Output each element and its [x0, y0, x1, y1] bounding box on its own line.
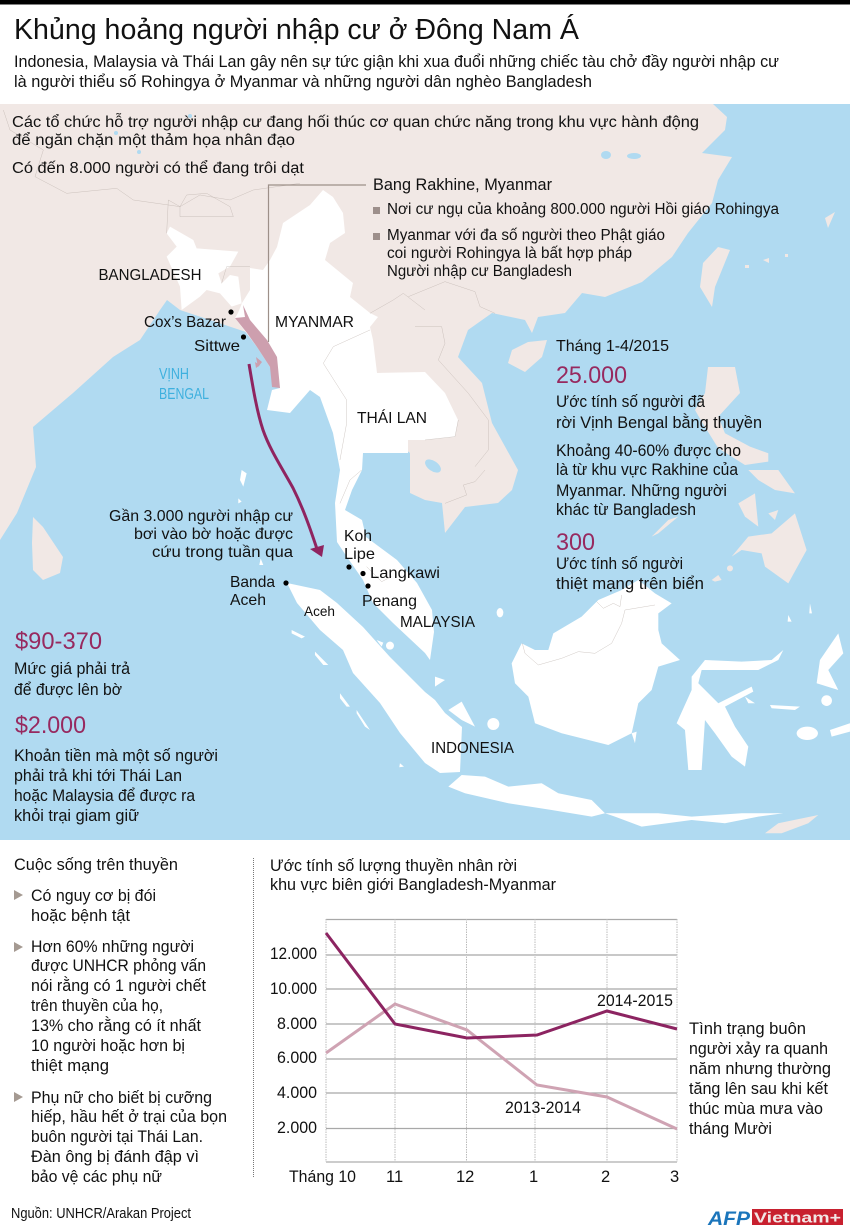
map labels: BANGLADESH: [98, 267, 202, 284]
side note: thúc mùa mưa vào: [689, 1100, 823, 1118]
callout: Rakhine state: Bang Rakhine, Myanmar: [373, 176, 552, 194]
y axis labels: 4.000: [277, 1084, 317, 1102]
stats: January to April 2015: [556, 338, 762, 593]
panel: life on boats: hoặc bệnh tật: [31, 907, 130, 925]
x axis labels: [289, 1168, 679, 1186]
x axis labels: 12: [456, 1168, 474, 1186]
Lesser Sunda: [605, 813, 783, 827]
x axis labels: 2: [601, 1168, 610, 1186]
panel: life on boats: hiếp, hầu hết ở trại của bọn: [31, 1108, 227, 1126]
x axis labels: 11: [386, 1168, 403, 1186]
Sulawesi: [677, 650, 783, 770]
map labels: Lipe: [344, 546, 375, 563]
title: Khủng hoảng người nhập cư ở Đông Nam Á: [14, 13, 580, 46]
callout: 3000 migrants: [109, 508, 293, 561]
stats: prices: [14, 628, 218, 825]
migration route arrow: [249, 364, 324, 557]
intro text: [12, 114, 699, 177]
side note: người xảy ra quanh: [689, 1040, 828, 1058]
panel: life on boats: trên thuyền của họ,: [31, 997, 163, 1015]
Java: [448, 775, 605, 817]
stats: prices: hoặc Malaysia để được ra: [14, 787, 196, 805]
stats: January to April 2015: là từ khu vực Rakhine của: [556, 461, 739, 479]
side note: [689, 1020, 831, 1138]
map labels: Langkawi: [370, 565, 440, 582]
x axis labels: 1: [529, 1168, 538, 1186]
stats: January to April 2015: Ước tính số người: [556, 555, 683, 573]
chart title: [270, 857, 556, 894]
callout: Rakhine state: [373, 176, 779, 280]
stats: prices: để được lên bờ: [14, 681, 122, 699]
panel: life on boats: Cuộc sống trên thuyền: [14, 856, 178, 874]
map labels: Cox’s Bazar: [144, 314, 227, 331]
panel: life on boats: được UNHCR phỏng vấn: [31, 957, 206, 975]
map land: islands in beige: [32, 212, 835, 833]
intro text: Các tổ chức hỗ trợ người nhập cư đang hối thúc cơ quan chức năng trong khu vực hành động: [12, 114, 699, 131]
side note: tăng lên sau khi kết: [689, 1080, 828, 1098]
stats: January to April 2015: khác từ Bangladesh: [556, 501, 696, 519]
intro text: để ngăn chặn một thảm họa nhân đạo: [12, 132, 295, 149]
stats: prices: Khoản tiền mà một số người: [14, 747, 218, 765]
stats: January to April 2015: Ước tính số người đã: [556, 393, 706, 411]
subtitle: Indonesia, Malaysia và Thái Lan gây nên sự tức giận khi xua đuổi những chiếc tàu chở đầy người nhập cư: [14, 53, 779, 71]
map labels: INDONESIA: [431, 740, 514, 757]
stats: January to April 2015: 300: [556, 529, 595, 556]
logo: [707, 1209, 843, 1230]
y axis labels: [270, 945, 317, 1137]
stats: January to April 2015: 25.000: [556, 362, 627, 389]
stats: prices: $2.000: [15, 712, 86, 739]
map labels: Sittwe: [194, 338, 240, 355]
stats: January to April 2015: rời Vịnh Bengal bằng thuyền: [556, 413, 762, 432]
panel: life on boats: Đàn ông bị đánh đập vì: [31, 1148, 199, 1166]
map labels: MALAYSIA: [400, 614, 475, 631]
map labels: Aceh: [230, 592, 266, 609]
stats: prices: phải trả khi tới Thái Lan: [14, 767, 182, 785]
map land: national borders: [3, 110, 655, 665]
series labels: [505, 992, 673, 1117]
map labels: Penang: [362, 593, 417, 610]
panel: life on boats: thiệt mạng: [31, 1057, 109, 1075]
stats: January to April 2015: Tháng 1-4/2015: [556, 338, 669, 355]
map labels: VỊNH: [159, 366, 189, 383]
map labels: Aceh: [304, 604, 335, 619]
y axis labels: 6.000: [277, 1049, 317, 1067]
stats: prices: $90-370: [15, 628, 102, 655]
panel: life on boats: 13% cho rằng có ít nhất: [31, 1016, 201, 1035]
chart title: khu vực biên giới Bangladesh-Myanmar: [270, 876, 556, 894]
map land: mainland Asia: [0, 104, 732, 540]
panel: life on boats: Có nguy cơ bị đói: [31, 887, 156, 905]
intro text: Có đến 8.000 người có thể đang trôi dạt: [12, 160, 305, 177]
map sea: [0, 104, 850, 840]
callout: Rakhine state: Myanmar với đa số người theo Phật giáo: [387, 227, 665, 244]
callout: 3000 migrants: bơi vào bờ hoặc được: [134, 526, 293, 543]
series 2014-2015: [326, 933, 677, 1038]
stats: January to April 2015: thiệt mạng trên biển: [556, 575, 704, 593]
side note: tháng Mười: [689, 1120, 772, 1138]
stats: prices: khỏi trại giam giữ: [14, 807, 139, 825]
panel: life on boats: 10 người hoặc hơn bị: [31, 1037, 185, 1055]
chart title: Ước tính số lượng thuyền nhân rời: [270, 857, 517, 875]
series labels: 2014-2015: [597, 992, 673, 1010]
side note: năm nhưng thường: [689, 1060, 831, 1078]
stats: prices: Mức giá phải trả: [14, 660, 131, 678]
leader line to Rakhine: [268, 185, 366, 342]
panel: life on boats: [14, 856, 227, 1186]
callout: 3000 migrants: Gần 3.000 người nhập cư: [109, 508, 293, 525]
callout: 3000 migrants: cứu trong tuần qua: [152, 544, 293, 561]
line chart: [270, 919, 679, 1186]
panel: life on boats: Hơn 60% những người: [31, 938, 194, 956]
panel: life on boats: buôn người tại Thái Lan.: [31, 1128, 203, 1146]
stats: January to April 2015: Myanmar. Những người: [556, 482, 727, 500]
map lakes and rivers: [114, 114, 641, 475]
map land: white highlighted countries: [167, 190, 850, 827]
stats: January to April 2015: Khoảng 40-60% được cho: [556, 442, 741, 460]
y axis labels: 8.000: [277, 1015, 317, 1033]
logo: Vietnam+: [754, 1210, 841, 1226]
callout: Rakhine state: Nơi cư ngụ của khoảng 800.000 người Hồi giáo Rohingya: [387, 201, 779, 218]
callout: Rakhine state: coi người Rohingya là bất hợp pháp: [387, 245, 632, 262]
subtitle: [14, 53, 779, 91]
Sumatra: [287, 583, 462, 773]
series labels: 2013-2014: [505, 1099, 581, 1117]
top black bar: [0, 0, 850, 4]
map labels: [98, 267, 514, 757]
x axis labels: 3: [670, 1168, 679, 1186]
panel: map: [0, 104, 850, 840]
x axis labels: Tháng 10: [289, 1168, 356, 1186]
map labels: THÁI LAN: [357, 408, 427, 427]
panel: life on boats: nói rằng có 1 người chết: [31, 976, 206, 995]
city dots: [228, 309, 371, 589]
logo: AFP: [707, 1209, 750, 1230]
map labels: BENGAL: [159, 386, 209, 403]
panel: life on boats: Phụ nữ cho biết bị cưỡng: [31, 1089, 212, 1107]
Bangladesh: [167, 227, 242, 310]
subtitle: là người thiểu số Rohingya ở Myanmar và những người dân nghèo Bangladesh: [14, 73, 592, 91]
callout: Rakhine state: Người nhập cư Bangladesh: [387, 263, 572, 280]
Borneo: [512, 580, 680, 745]
y axis labels: 2.000: [277, 1119, 317, 1137]
source: Nguồn: UNHCR/Arakan Project: [11, 1206, 191, 1222]
panel: life on boats: bảo vệ các phụ nữ: [31, 1168, 162, 1186]
Myanmar, Thailand, peninsula: [235, 190, 458, 660]
series 2013-2014: [326, 1004, 677, 1129]
y axis labels: 10.000: [270, 980, 317, 998]
map labels: Banda: [230, 574, 275, 591]
Rakhine state highlight: [235, 305, 280, 388]
map labels: Koh: [344, 528, 372, 545]
side note: Tình trạng buôn: [689, 1020, 806, 1038]
y axis labels: 12.000: [270, 945, 317, 963]
map labels: MYANMAR: [275, 314, 354, 331]
